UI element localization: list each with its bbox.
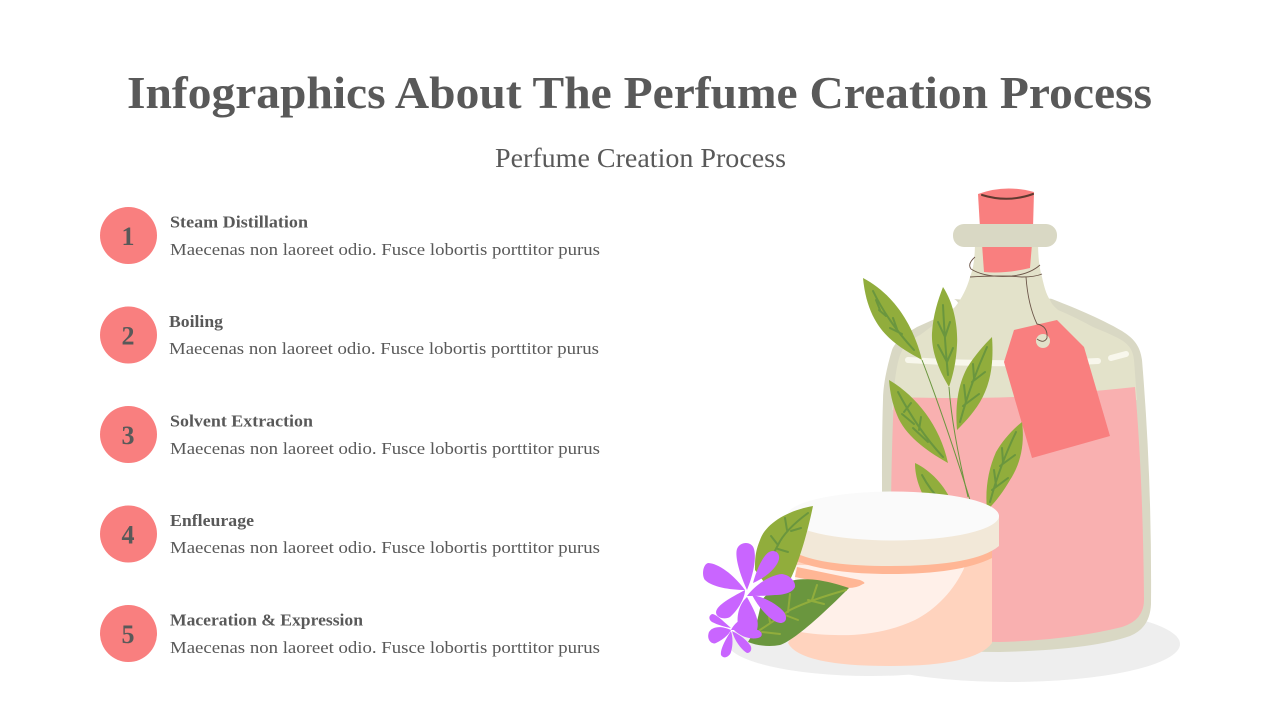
jar <box>787 492 999 666</box>
light leaf <box>755 506 813 590</box>
leaf 6 <box>915 463 953 505</box>
step 5: 5 <box>122 620 134 649</box>
lid <box>795 516 999 566</box>
ground shadow <box>727 606 1180 682</box>
string <box>970 257 1047 341</box>
step 4: Enfleurage <box>170 511 254 530</box>
leaf 5 <box>986 422 1023 510</box>
step 1: Steam Distillation <box>170 212 309 232</box>
step 4 <box>100 506 600 562</box>
step 4: Maecenas non laoreet odio. Fusce lobortis porttitor purus <box>170 538 600 557</box>
step 5: Maecenas non laoreet odio. Fusce lobortis porttitor purus <box>170 638 600 657</box>
jar leaves and flowers <box>703 506 849 657</box>
bottle <box>882 188 1151 652</box>
large flower <box>703 543 795 632</box>
step 2: 2 <box>122 322 134 350</box>
step 2 <box>100 306 599 364</box>
glass highlight <box>908 354 1126 363</box>
step 3: Maecenas non laoreet odio. Fusce lobortis porttitor purus <box>170 439 600 458</box>
step 3 <box>100 406 600 463</box>
tag <box>1004 320 1110 458</box>
leaf 2 <box>932 287 957 387</box>
pink liquid <box>891 387 1144 642</box>
step 5 <box>100 605 600 662</box>
dark leaf <box>748 579 849 646</box>
plant leaves <box>863 278 1023 510</box>
step 2: Boiling <box>169 312 224 331</box>
step 5: Maceration & Expression <box>170 610 364 630</box>
step 1: 1 <box>122 222 134 251</box>
stems <box>922 360 970 500</box>
illustration: perfume bottle and jar <box>703 188 1180 682</box>
collar <box>953 224 1057 247</box>
jar highlight <box>795 565 965 635</box>
process list <box>100 207 600 662</box>
step 3: 3 <box>122 421 134 450</box>
cork <box>978 188 1034 228</box>
leaf 4 <box>889 380 948 463</box>
leaf 3 <box>956 337 992 430</box>
step 2: Maecenas non laoreet odio. Fusce lobortis porttitor purus <box>169 339 599 358</box>
orange band <box>796 550 992 574</box>
step 1: Maecenas non laoreet odio. Fusce lobortis porttitor purus <box>170 240 600 259</box>
step 1 <box>100 207 600 264</box>
subtitle: Perfume Creation Process <box>495 143 786 173</box>
step 4: 4 <box>122 520 134 550</box>
small flower <box>708 614 762 657</box>
leaf 1 <box>863 278 922 360</box>
title: Infographics About The Perfume Creation Process <box>127 67 1152 118</box>
step 3: Solvent Extraction <box>170 412 314 430</box>
